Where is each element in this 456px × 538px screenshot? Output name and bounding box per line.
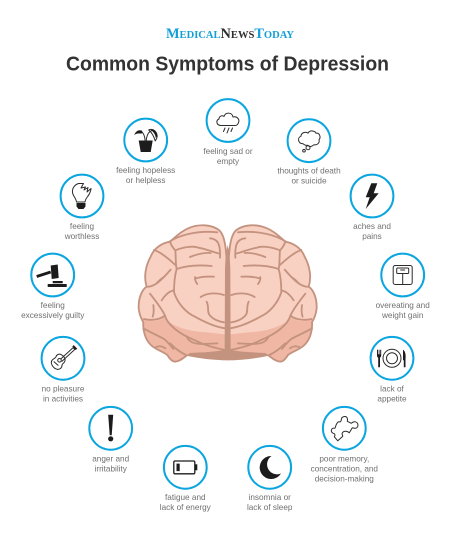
label: or suicide — [291, 176, 327, 186]
symptom: poor memory, concentration, and decision-making — [311, 407, 378, 484]
icon: weighing scale — [393, 266, 412, 284]
symptom: no pleasure in activities — [42, 337, 85, 404]
label: irritability — [95, 464, 128, 474]
icon: puzzle piece — [331, 417, 358, 441]
symptom: feeling hopeless or helpless — [116, 119, 175, 185]
label: feeling — [70, 222, 94, 231]
label: lack of energy — [160, 503, 212, 512]
label: weight gain — [381, 311, 424, 320]
symptom: lack of appetite — [371, 337, 413, 404]
icon: low battery — [174, 461, 197, 474]
label: or helpless — [126, 176, 166, 185]
label: excessively guilty — [21, 311, 85, 320]
label: worthless — [64, 232, 99, 241]
icon: crescent moon — [260, 456, 281, 479]
label: lack of — [380, 384, 404, 394]
brain left hemisphere — [139, 225, 227, 362]
label: fatigue and — [165, 493, 206, 502]
icon: acoustic guitar — [51, 346, 76, 369]
brain central fissure — [186, 245, 269, 360]
label: no pleasure — [42, 384, 84, 394]
label: empty — [217, 157, 240, 166]
label: in activities — [43, 394, 83, 404]
symptom: anger and irritability — [89, 407, 132, 474]
title: Common Symptoms of Depression — [66, 54, 389, 76]
symptom: feeling worthless — [61, 175, 103, 241]
label: thoughts of death — [277, 166, 341, 176]
symptom: feeling excessively guilty — [21, 254, 85, 320]
symptom: insomnia or lack of sleep — [247, 446, 293, 512]
label: decision-making — [315, 474, 374, 484]
icon: lightning bolt — [366, 183, 379, 209]
icon: gavel — [37, 264, 67, 287]
symptom: feeling sad or empty — [203, 99, 253, 166]
icon: plate and cutlery — [377, 349, 406, 367]
symptom: thoughts of death or suicide — [277, 119, 341, 186]
logo: MedicalNewsToday — [166, 26, 294, 42]
icon: wilted plant — [134, 129, 157, 152]
brain right hemisphere — [228, 225, 317, 362]
label: aches and — [353, 222, 391, 231]
label: poor memory, — [319, 454, 369, 464]
symptom: aches and pains — [351, 175, 393, 241]
icon: broken light bulb — [72, 184, 91, 209]
label: insomnia or — [249, 493, 291, 502]
icon: rain cloud — [217, 113, 239, 133]
label: anger and — [92, 454, 129, 464]
brain illustration — [139, 225, 317, 362]
label: feeling hopeless — [116, 166, 175, 175]
label: lack of sleep — [247, 503, 293, 512]
label: concentration, and — [311, 464, 378, 474]
label: feeling — [41, 301, 65, 310]
label: pains — [362, 232, 382, 241]
symptom: fatigue and lack of energy — [160, 446, 212, 512]
label: overeating and — [376, 301, 430, 310]
icon: thought bubble — [299, 131, 320, 152]
icon: exclamation mark — [108, 415, 113, 441]
symptom: overeating and weight gain — [376, 254, 430, 320]
label: feeling sad or — [203, 147, 253, 156]
label: appetite — [377, 394, 407, 404]
